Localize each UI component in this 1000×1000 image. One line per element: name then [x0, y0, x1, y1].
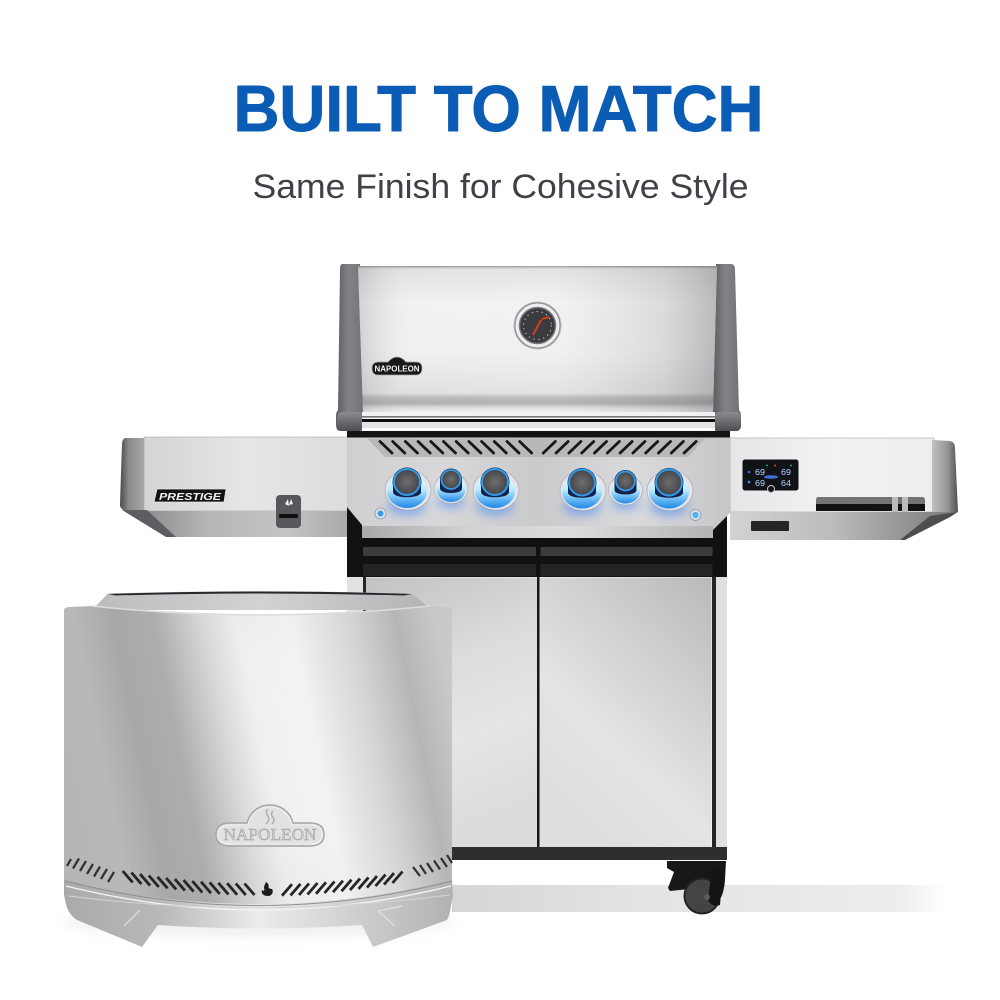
cart [347, 547, 727, 914]
handle recess [363, 547, 712, 576]
gas grill [120, 264, 958, 914]
hood side trim [336, 264, 365, 431]
trim end caps [337, 412, 741, 431]
panel fascia [347, 437, 730, 538]
right cart side [716, 577, 727, 847]
digital thermometer display: 69 [781, 468, 792, 477]
temperature gauge [514, 302, 562, 350]
pit body [64, 606, 452, 911]
right door [540, 578, 712, 847]
digital thermometer display [742, 460, 798, 492]
black frame under control panel [347, 505, 727, 577]
bottom frame [347, 847, 727, 860]
soft shadow under pit [63, 906, 453, 938]
right ignition button [690, 510, 701, 520]
knob 3 [473, 468, 519, 515]
tool holder slot [816, 497, 925, 512]
Napoleon hood badge: NAPOLEON [374, 364, 420, 374]
hood handle [362, 412, 715, 431]
Prestige badge: PRESTIGE [159, 492, 221, 503]
door gap and post [363, 577, 716, 847]
embossed Napoleon logo: NAPOLEON [224, 825, 316, 844]
floor shadow [452, 885, 948, 912]
right side shelf [730, 438, 958, 540]
panel lower lip [362, 526, 713, 538]
right shelf upper panel [730, 438, 934, 512]
Napoleon hood badge [372, 357, 422, 375]
hood right trim [713, 264, 741, 431]
side vent slashes [67, 855, 452, 882]
black shadow under handle [347, 431, 730, 438]
shelf lower lip [145, 511, 348, 537]
vent slots [380, 442, 696, 453]
lower vent badge [751, 521, 789, 531]
subtitle: Same Finish for Cohesive Style [252, 168, 748, 206]
right shelf lower lip [730, 512, 958, 540]
digital thermometer display: 64 [781, 479, 792, 488]
fire pit [63, 591, 453, 947]
hood steel lid [358, 266, 717, 412]
left side shelf [120, 437, 348, 537]
Prestige badge [154, 489, 226, 503]
pit top cone [92, 591, 432, 610]
caster wheel [667, 861, 726, 914]
shelf latch [276, 495, 301, 528]
knob 4 [560, 468, 606, 516]
pit base ring [64, 880, 453, 947]
grill hood [336, 264, 741, 431]
left ignition button [375, 508, 386, 519]
flame icon [262, 882, 273, 896]
title: BUILT TO MATCH [234, 72, 764, 145]
shelf upper panel [144, 437, 348, 511]
left cart side [347, 577, 363, 847]
knob 5 [608, 470, 642, 510]
right shelf end cap [932, 440, 958, 512]
digital thermometer display: 69 [755, 479, 766, 488]
digital thermometer display: 69 [755, 468, 766, 477]
body reflection overlay [230, 640, 350, 860]
shelf end cap [120, 438, 145, 512]
embossed Napoleon logo [216, 805, 324, 846]
control panel [347, 431, 730, 538]
knob 1 [385, 468, 431, 515]
knob 2 [434, 468, 468, 508]
rim highlight [92, 606, 430, 615]
left door [366, 578, 537, 847]
knob 6 [647, 468, 693, 516]
center vent slashes [123, 871, 402, 896]
vent recess [367, 438, 705, 457]
